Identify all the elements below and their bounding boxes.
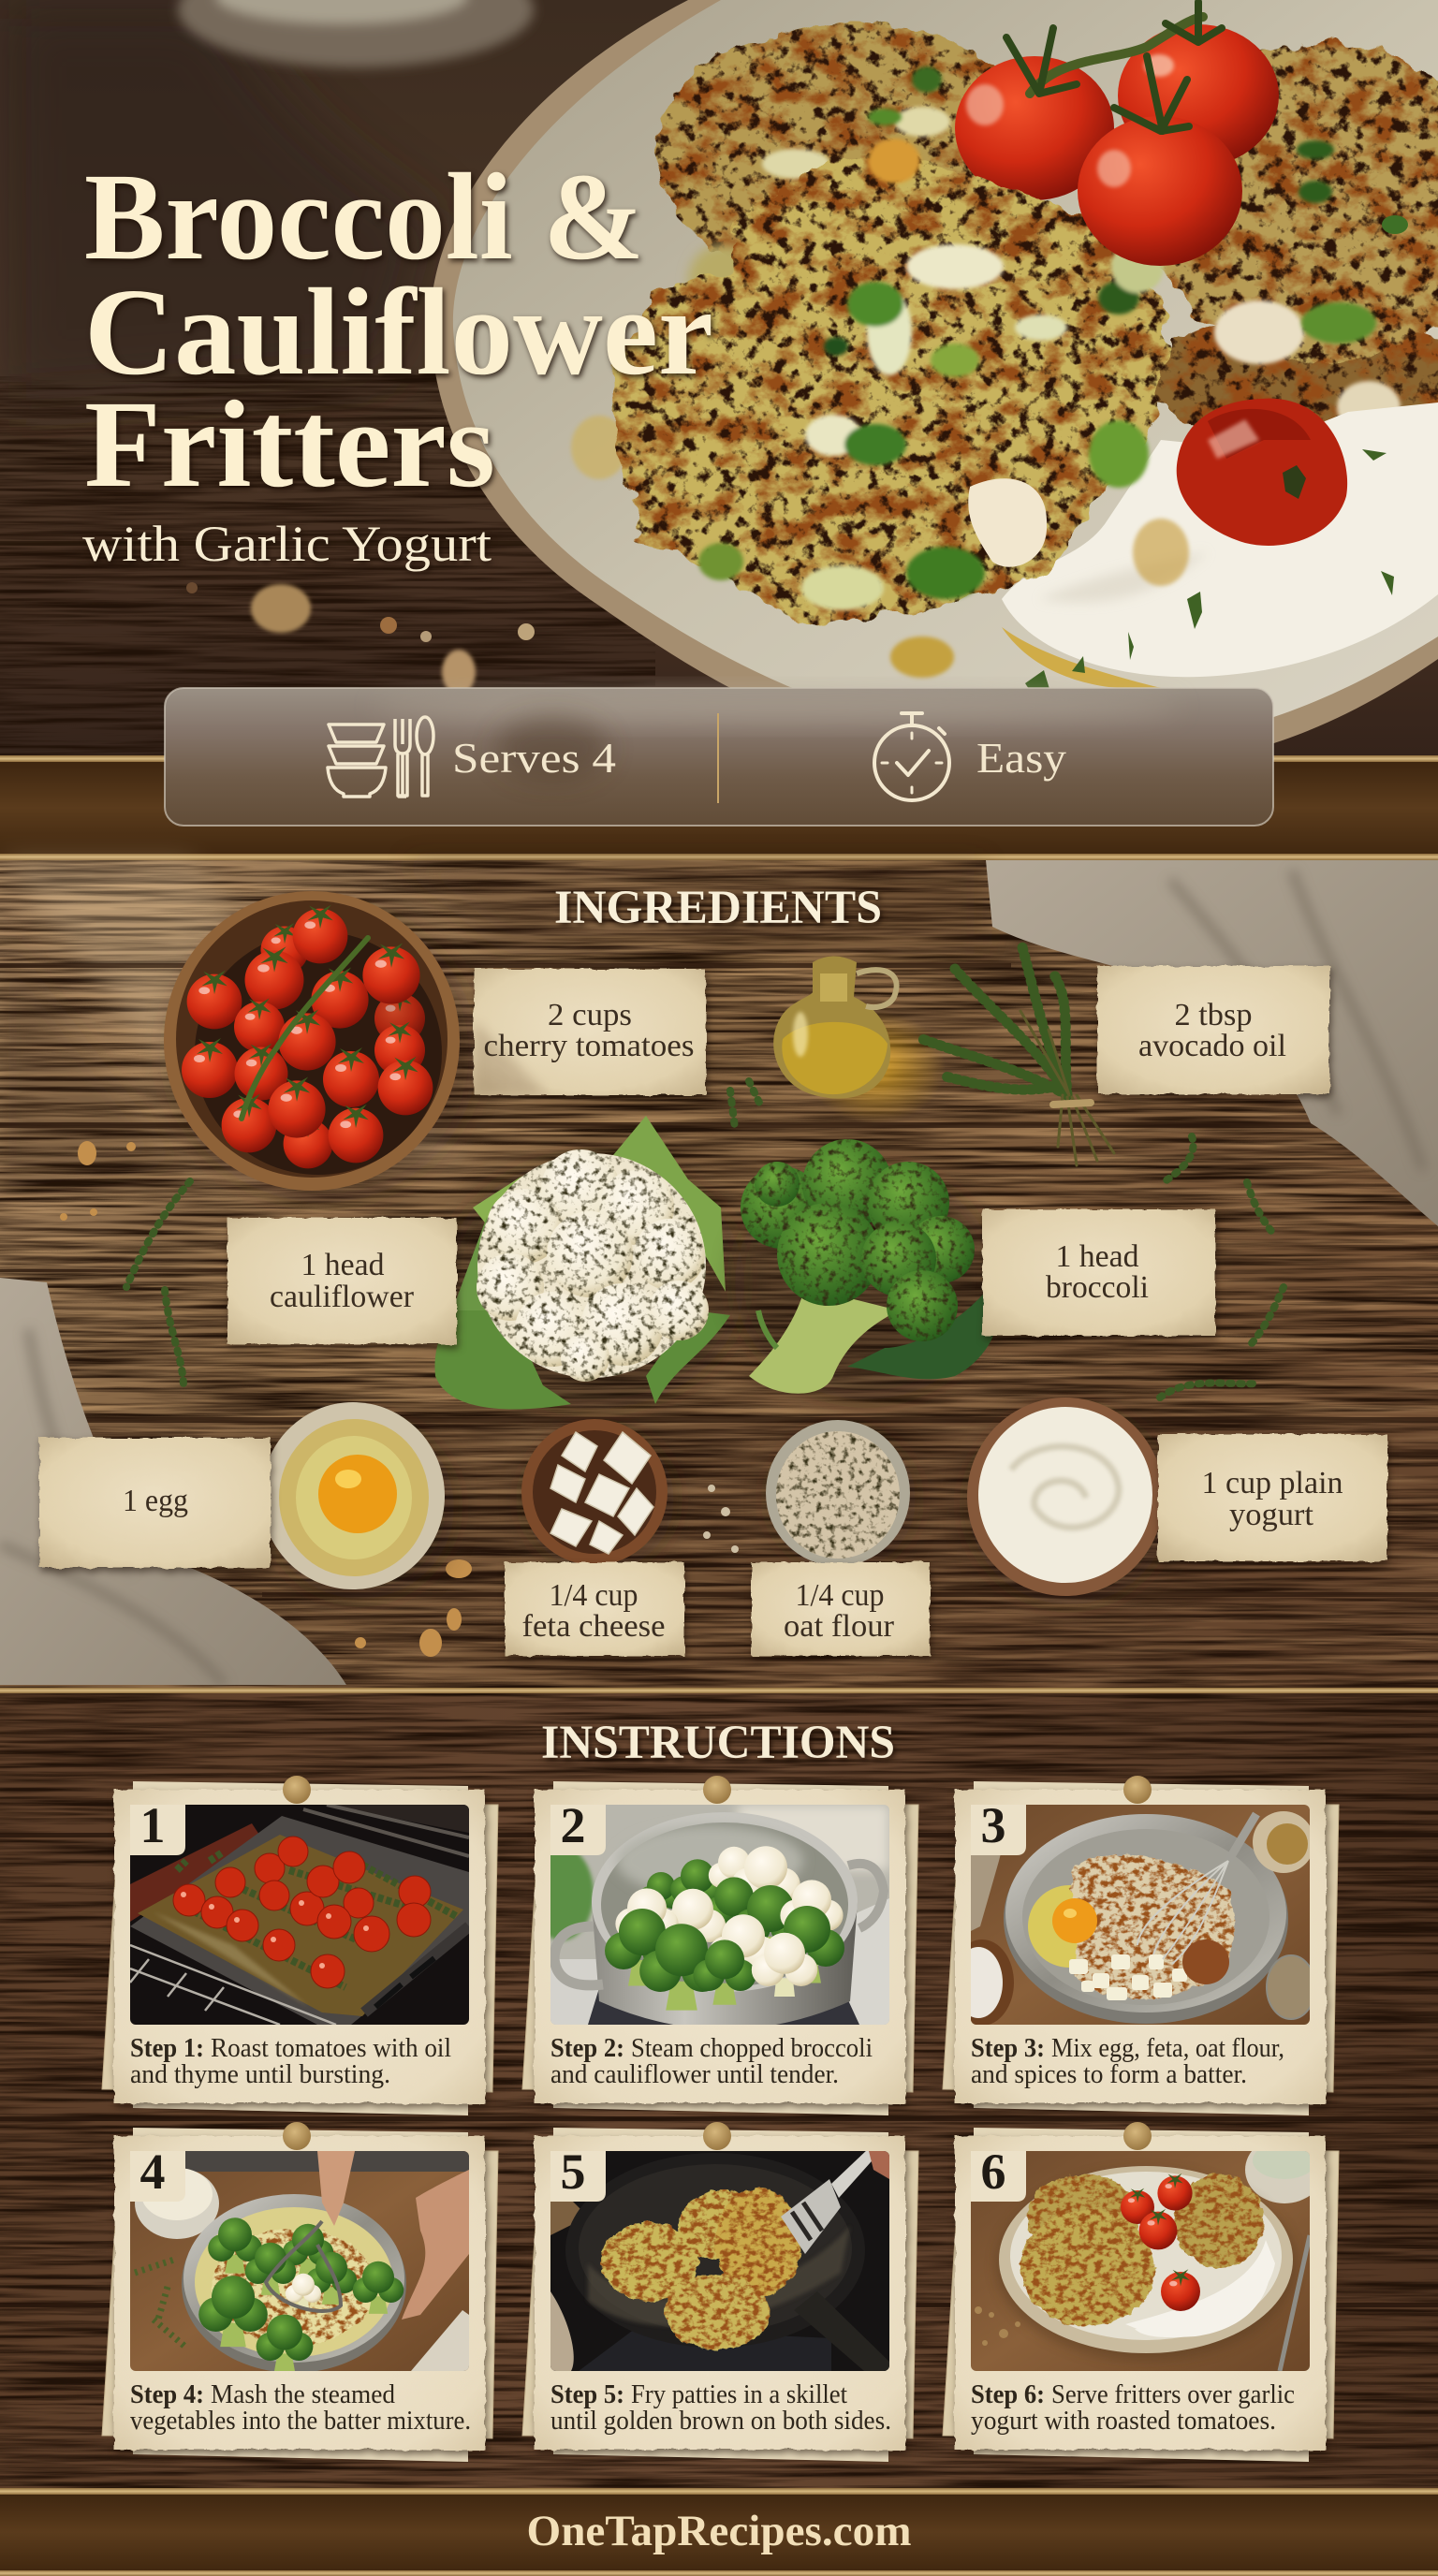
title: Fritters (84, 374, 495, 513)
feta bowl (521, 1419, 674, 1573)
pin (283, 2122, 311, 2150)
step 3 photo (950, 1805, 1315, 2026)
panel: step 4 (102, 2122, 498, 2462)
step 2 text: and cauliflower until tender. (550, 2060, 839, 2089)
pin (703, 2122, 731, 2150)
yogurt bowl (967, 1398, 1170, 1604)
ingredient card: cauliflower: cauliflower (270, 1280, 415, 1314)
ingredient card: egg: 1 egg (123, 1484, 188, 1518)
step 5 text (550, 2380, 891, 2436)
ingredient card: broccoli: broccoli (1046, 1270, 1149, 1305)
title (84, 147, 713, 513)
gold and brown band (0, 755, 1438, 860)
cloth: top right (986, 860, 1438, 1226)
footer website text: OneTapRecipes.com (526, 2507, 912, 2555)
pin (283, 1776, 311, 1804)
panel: step 6 (943, 2122, 1339, 2462)
step 5 text: Fry patties in a skillet (631, 2380, 847, 2409)
thyme bundle (922, 947, 1114, 1165)
step 2 text: Step 2: (550, 2034, 624, 2063)
ingredient card: cauliflower: 1 head (301, 1248, 384, 1282)
step number: 6 (981, 2144, 1005, 2200)
ingredient card: avocado oil (1097, 966, 1329, 1094)
ingredient card: yogurt: 1 cup plain (1202, 1466, 1343, 1500)
title: Cauliflower (84, 262, 713, 401)
ingredient card: broccoli (982, 1209, 1215, 1336)
step number: 2 (560, 1797, 586, 1853)
icon: stopwatch (874, 713, 949, 800)
ingredients heading: INGREDIENTS (554, 882, 882, 934)
step 2 text (550, 2034, 873, 2089)
step 4 text: Mash the steamed (211, 2380, 395, 2409)
roasted tomatoes on vine (back) (955, 24, 1279, 200)
footer band (0, 2488, 1438, 2576)
instructions heading: INSTRUCTIONS (541, 1717, 895, 1769)
oil bottle (773, 957, 946, 1123)
icon: bowls and cutlery (328, 717, 433, 797)
step 3 text: and spices to form a batter. (971, 2060, 1247, 2089)
pin (703, 1776, 731, 1804)
ingredient card: cherry tomatoes (474, 969, 706, 1095)
step 3 text: Step 3: (971, 2034, 1045, 2063)
step 4 text: Step 4: (130, 2380, 204, 2409)
info pill (165, 688, 1273, 826)
difficulty text: Easy (976, 734, 1066, 782)
step number: 5 (560, 2144, 586, 2200)
ingredient card: cherry tomatoes: cherry tomatoes (483, 1029, 695, 1063)
step 6 text: Step 6: (971, 2380, 1045, 2409)
hero background: wooden table (0, 0, 1438, 763)
step 5 text: Step 5: (550, 2380, 624, 2409)
ingredient card: broccoli: 1 head (1056, 1239, 1138, 1274)
step 3 text (971, 2034, 1284, 2089)
step 4 photo (130, 2151, 469, 2373)
ingredient card: feta cheese: 1/4 cup (549, 1578, 638, 1613)
lower right fritter (1147, 312, 1438, 446)
step 6 photo (971, 2136, 1324, 2371)
step 1 text: Roast tomatoes with oil (211, 2034, 451, 2063)
pin (1123, 2122, 1152, 2150)
tomato bowl (164, 891, 477, 1203)
garlic yogurt (1002, 402, 1438, 700)
title: Broccoli & (84, 147, 644, 285)
step 4 text (130, 2380, 471, 2436)
step 5 photo (550, 2148, 889, 2371)
ingredient card: egg (39, 1438, 271, 1568)
cauliflower (435, 1116, 744, 1410)
serves text: Serves 4 (452, 734, 616, 782)
ingredient card: oat flour: 1/4 cup (796, 1578, 884, 1613)
pin (1123, 1776, 1152, 1804)
step 6 text: yogurt with roasted tomatoes. (971, 2407, 1276, 2436)
ingredient card: cherry tomatoes: 2 cups (548, 998, 632, 1032)
step 2 photo (530, 1805, 889, 2029)
ingredient card: feta cheese (505, 1562, 684, 1656)
ingredient card: oat flour (752, 1562, 930, 1656)
ingredient card: oat flour: oat flour (784, 1609, 895, 1644)
step 6 text (971, 2380, 1295, 2436)
step 6 text: Serve fritters over garlic (1051, 2380, 1295, 2409)
back left fritter (655, 23, 1039, 318)
panel: step 3 (943, 1776, 1339, 2115)
step 3 text: Mix egg, feta, oat flour, (1051, 2034, 1284, 2063)
ingredient card: avocado oil: 2 tbsp (1174, 998, 1253, 1032)
main fritter (610, 139, 1170, 626)
crumbs (60, 1141, 739, 1657)
step 4 text: vegetables into the batter mixture. (130, 2407, 471, 2436)
front tomatoes and vine (1006, 2, 1347, 546)
step 5 text: until golden brown on both sides. (550, 2407, 891, 2436)
oat flour jar (766, 1420, 916, 1573)
step 1 text: and thyme until bursting. (130, 2060, 390, 2089)
step number: 1 (140, 1797, 165, 1853)
panel: step 1 (102, 1776, 498, 2115)
step 1 text (130, 2034, 451, 2089)
hero plate (431, 0, 1438, 772)
step number: 4 (140, 2144, 165, 2200)
step 1 text: Step 1: (130, 2034, 204, 2063)
step 2 text: Steam chopped broccoli (631, 2034, 873, 2063)
ingredient card: yogurt (1158, 1434, 1387, 1561)
egg bowl (261, 1402, 454, 1599)
scattered thyme sprigs and crumbs (85, 1081, 1284, 1398)
step number: 3 (981, 1797, 1005, 1853)
right fritter (1142, 42, 1438, 364)
ingredient card: cauliflower (227, 1218, 457, 1344)
ingredient card: yogurt: yogurt (1229, 1498, 1314, 1532)
ingredient card: avocado oil: avocado oil (1138, 1029, 1286, 1063)
ingredients section background (0, 860, 1438, 1688)
ingredient card: feta cheese: feta cheese (522, 1609, 665, 1644)
panel: step 5 (522, 2122, 918, 2462)
broccoli (735, 1139, 1000, 1399)
panel: step 2 (522, 1776, 918, 2115)
cloth: bottom left (0, 1278, 346, 1685)
instructions section background (0, 1688, 1438, 2489)
divider (717, 713, 719, 803)
subtitle: with Garlic Yogurt (82, 516, 492, 572)
step 1 photo (130, 1800, 469, 2025)
